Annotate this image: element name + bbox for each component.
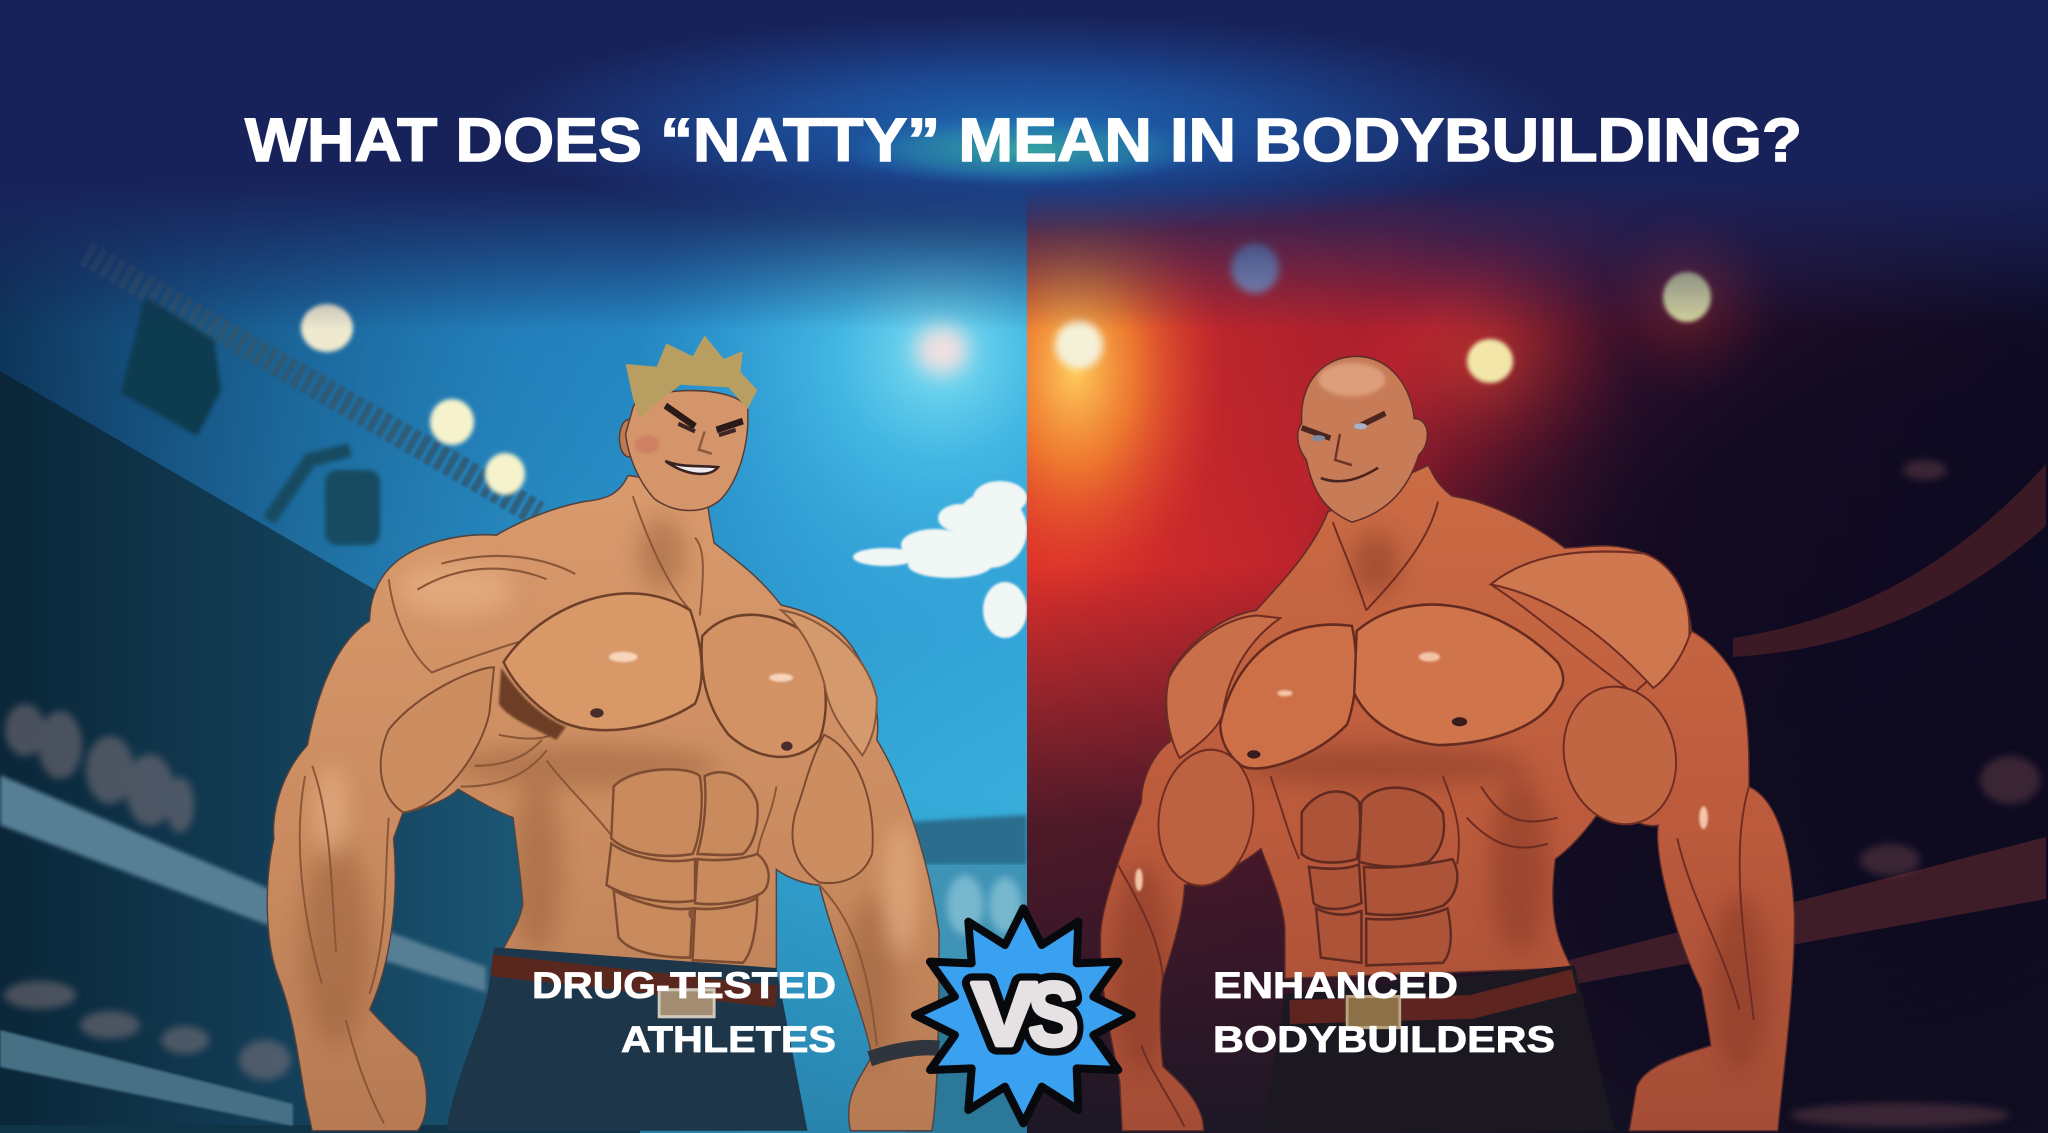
head [1298,356,1427,522]
label: drug-tested athletes: ATHLETES [621,1019,836,1060]
figure: enhanced bodybuilder [1100,356,1794,1131]
right background: dark arena with red lights [1027,190,2048,1133]
wristband [870,1048,939,1059]
starburst [915,908,1132,1123]
nose [699,431,712,454]
soft shadows on body [303,517,918,1072]
pants [1263,965,1615,1131]
muscle shading [1117,501,1754,1127]
pants [446,947,807,1131]
label: enhanced bodybuilders: ENHANCED [1213,965,1458,1006]
left background: arena with blue sky [0,194,1027,1133]
body silhouette [267,476,939,1131]
right biceps [792,735,873,883]
right pectoral [702,615,826,757]
right pectoral [1354,605,1563,745]
nipples [1247,717,1467,759]
left pectoral [1220,625,1356,769]
label: enhanced bodybuilders: BODYBUILDERS [1213,1019,1555,1060]
VS lettering: S [1028,965,1078,1065]
left deltoid [1166,615,1280,758]
biceps [381,667,494,812]
pectoral highlights [609,652,793,682]
right deltoid [781,610,877,755]
belt buckle [659,990,714,1017]
body silhouette [1100,465,1794,1131]
VS lettering: V [972,965,1037,1065]
cheek blush [635,435,660,454]
eyebrows and eyes [1302,413,1385,438]
nose and mouth [1335,434,1352,465]
eyebrows and eyes [665,406,743,430]
figure: natural drug-tested athlete [267,336,939,1131]
VS lettering: S [1028,965,1078,1065]
label: drug-tested athletes: DRUG-TESTED [532,965,836,1006]
highlights [1135,652,1708,891]
VS lettering: V [972,965,1037,1065]
soft shadows on body [1113,533,1768,1072]
belt [492,965,776,997]
header band [0,0,2048,330]
right biceps [1546,669,1694,842]
belt [1290,981,1574,1012]
nipples [590,708,793,919]
hair [626,336,757,418]
grinning mouth [665,461,718,474]
shaded armpit [499,667,566,740]
abdominal muscles [1302,788,1457,965]
abdominal muscles [606,769,769,963]
muscle shading [300,496,877,1124]
title: WHAT DOES “NATTY” MEAN IN BODYBUILDING? [245,106,1802,174]
label: enhanced bodybuilders [1213,965,1555,1060]
belt buckle [1347,997,1400,1028]
label: drug-tested athletes [532,965,836,1060]
cloud [853,481,1027,638]
right deltoid [1491,552,1689,688]
head [619,336,757,511]
VS starburst badge [915,908,1132,1123]
left pectoral [504,593,702,730]
biceps [1149,741,1263,894]
VS lettering [972,965,1078,1065]
